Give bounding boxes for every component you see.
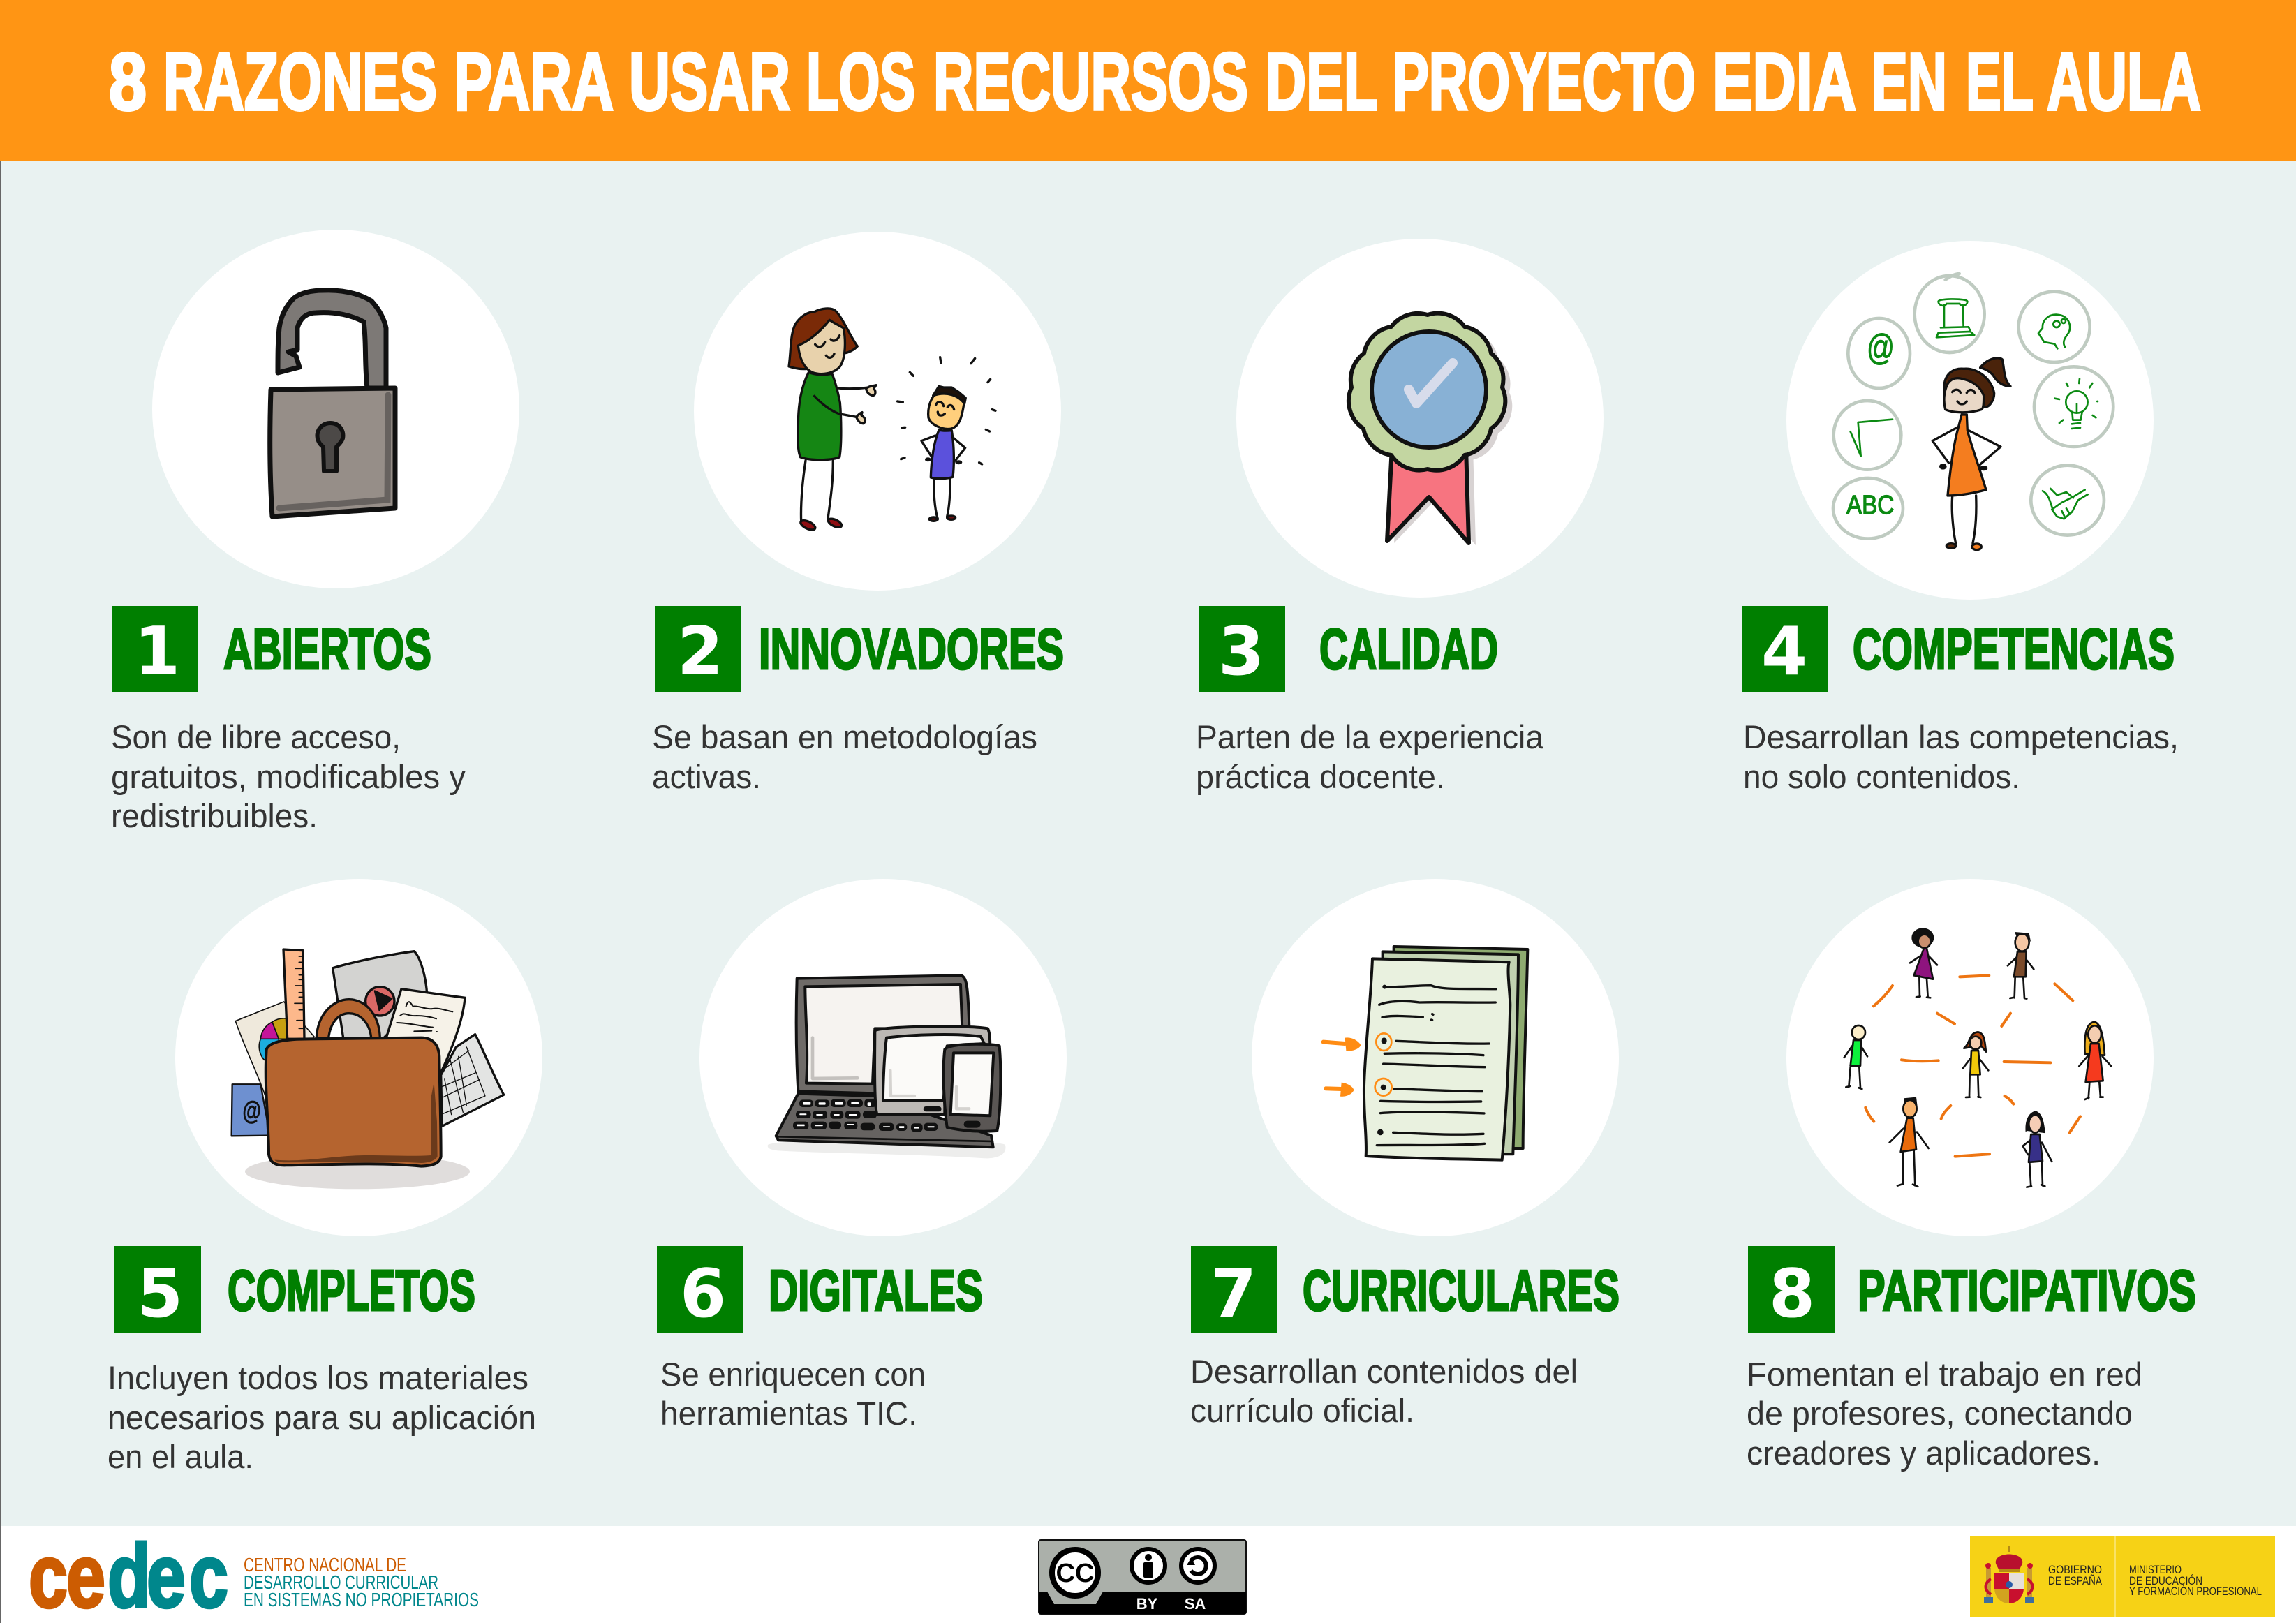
description xyxy=(1190,1353,1578,1429)
title: LOS xyxy=(806,36,915,127)
icon: girl with competence bubbles: ABC xyxy=(1846,490,1894,520)
circle background xyxy=(699,879,1067,1236)
number 4: 4 xyxy=(1761,614,1807,690)
number 7 xyxy=(1191,1246,1277,1333)
number 5: 5 xyxy=(137,1256,183,1333)
badge: creative commons BY-SA: SA xyxy=(1185,1595,1206,1613)
panel: reason 8 participativos xyxy=(1747,879,2196,1472)
title: 8 xyxy=(109,36,147,127)
title: EDIA xyxy=(1712,36,1856,127)
description: Incluyen todos los materiales xyxy=(108,1359,528,1396)
coat of arms xyxy=(1984,1546,2034,1603)
description: Desarrollan contenidos del xyxy=(1190,1353,1578,1390)
description xyxy=(1196,718,1544,795)
description: redistribuibles. xyxy=(111,797,318,834)
description xyxy=(652,718,1037,795)
logo: cedec: CENTRO NACIONAL DE xyxy=(244,1554,406,1576)
panel: reason 3 calidad xyxy=(1196,239,1604,795)
panel: reason 7 curriculares xyxy=(1190,879,1620,1429)
number 1 xyxy=(112,606,198,692)
icon: network of people xyxy=(1844,928,2111,1187)
number 6: 6 xyxy=(680,1256,726,1333)
description xyxy=(1743,718,2179,795)
icon: quality rosette xyxy=(1349,313,1512,545)
number 4 xyxy=(1742,606,1828,692)
circle background xyxy=(1236,239,1604,598)
circle background xyxy=(175,879,542,1236)
description: gratuitos, modificables y xyxy=(111,758,466,795)
icon: open padlock xyxy=(270,290,395,517)
number 1: 1 xyxy=(134,614,180,690)
description: creadores y aplicadores. xyxy=(1747,1435,2101,1472)
logo: cedec: DESARROLLO CURRICULAR xyxy=(244,1571,438,1593)
title: EL xyxy=(1966,36,2034,127)
icon: briefcase with materials: @ xyxy=(242,1096,261,1125)
title: EN xyxy=(1872,36,1947,127)
title: RECURSOS xyxy=(933,36,1248,127)
heading: COMPLETOS xyxy=(228,1258,475,1323)
description: en el aula. xyxy=(108,1438,253,1475)
logo: gobierno de españa xyxy=(1970,1536,2275,1617)
title: DEL xyxy=(1266,36,1378,127)
number 2 xyxy=(655,606,741,692)
logo: gobierno de españa: MINISTERIO xyxy=(2129,1563,2182,1576)
logo: gobierno de españa: DE EDUCACIÓN xyxy=(2129,1574,2202,1587)
icon: curriculum document xyxy=(1324,947,1527,1160)
number 8 xyxy=(1748,1246,1835,1333)
number 7: 7 xyxy=(1210,1256,1257,1333)
icon: laptop, tablet and phone xyxy=(768,975,1005,1158)
panel: reason 1 abiertos xyxy=(111,230,519,834)
number 2: 2 xyxy=(677,614,723,690)
panel: reason 4 competencias xyxy=(1742,241,2179,795)
title: PROYECTO xyxy=(1393,36,1696,127)
description xyxy=(1747,1356,2142,1472)
footer band xyxy=(1,1525,2296,1623)
panel: reason 6 digitales xyxy=(657,879,1067,1432)
description xyxy=(660,1356,926,1432)
description: Se basan en metodologías xyxy=(652,718,1037,755)
icon: girl with competence bubbles: @ xyxy=(1867,327,1895,368)
logo: cedec: EN SISTEMAS NO PROPIETARIOS xyxy=(244,1589,479,1610)
logo: gobierno de españa: DE ESPAÑA xyxy=(2048,1574,2103,1587)
heading: DIGITALES xyxy=(769,1258,983,1323)
icon: girl with competence bubbles xyxy=(1833,274,2113,550)
description: práctica docente. xyxy=(1196,758,1445,795)
heading: CURRICULARES xyxy=(1303,1258,1620,1323)
title: USAR xyxy=(629,36,790,127)
description: activas. xyxy=(652,758,761,795)
title xyxy=(109,36,2201,127)
number 8: 8 xyxy=(1769,1256,1815,1333)
circle background xyxy=(152,230,519,588)
description: Fomentan el trabajo en red xyxy=(1747,1356,2142,1393)
circle background xyxy=(1786,879,2154,1236)
icon: teacher and student xyxy=(789,309,995,532)
number 3 xyxy=(1199,606,1285,692)
logo: cedec xyxy=(29,1525,479,1623)
description: currículo oficial. xyxy=(1190,1392,1414,1429)
title: AULA xyxy=(2047,36,2201,127)
number 5 xyxy=(114,1246,201,1333)
number 3: 3 xyxy=(1218,614,1264,690)
circle background xyxy=(694,232,1061,591)
description: necesarios para su aplicación xyxy=(108,1399,536,1436)
heading: INNOVADORES xyxy=(759,616,1064,681)
heading: CALIDAD xyxy=(1319,616,1498,681)
heading: ABIERTOS xyxy=(223,616,431,681)
description: Desarrollan las competencias, xyxy=(1743,718,2179,755)
logo: gobierno de españa: GOBIERNO xyxy=(2048,1563,2102,1576)
description: de profesores, conectando xyxy=(1747,1395,2133,1432)
panel: reason 5 completos xyxy=(108,879,542,1475)
title: RAZONES xyxy=(163,36,437,127)
description xyxy=(111,718,466,834)
description: Parten de la experiencia xyxy=(1196,718,1544,755)
circle background xyxy=(1252,879,1619,1236)
circle background xyxy=(1786,241,2154,600)
panel: reason 2 innovadores xyxy=(652,232,1064,795)
badge: creative commons BY-SA: CC xyxy=(1056,1559,1094,1588)
number 6 xyxy=(657,1246,743,1333)
logo: gobierno de españa: Y FORMACIÓN PROFESIONAL xyxy=(2129,1585,2262,1598)
icon: briefcase with materials xyxy=(232,949,504,1189)
title: PARA xyxy=(454,36,614,127)
description: Son de libre acceso, xyxy=(111,718,401,755)
description xyxy=(108,1359,536,1475)
description: no solo contenidos. xyxy=(1743,758,2020,795)
description: Se enriquecen con xyxy=(660,1356,926,1393)
badge: creative commons BY-SA xyxy=(1039,1540,1246,1614)
badge: creative commons BY-SA: BY xyxy=(1136,1595,1158,1613)
description: herramientas TIC. xyxy=(660,1395,917,1432)
header banner xyxy=(0,0,2296,161)
